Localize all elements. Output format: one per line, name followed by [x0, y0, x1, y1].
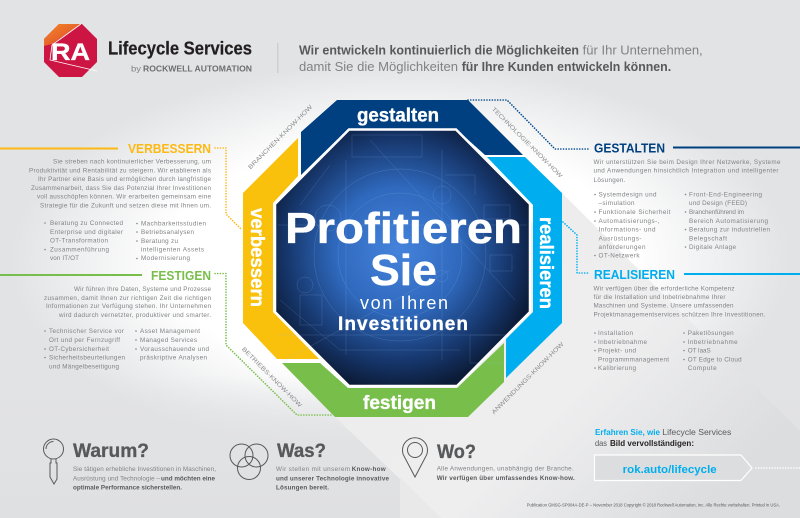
band: realisieren [487, 157, 562, 378]
panel: Festigen: OT-Cybersicherheit [49, 346, 109, 353]
panel: Verbessern: von IT/OT [50, 255, 79, 262]
panel: Festigen: Vorausschauende und [140, 346, 209, 353]
band: festigen [282, 343, 504, 417]
label: Anwendungs-Know-how: ANWENDUNGS-KNOW-HOW [491, 341, 566, 416]
panel: Verbessern: Beratung zu [141, 238, 178, 245]
label: Branchen-Know-how: BRANCHEN-KNOW-HOW [248, 104, 314, 171]
panel: Festigen: zusammen, damit Ihnen zur richtigen Zeit die richtigen [44, 295, 211, 302]
panel: Verbessern: Zusammenarbeit, dass Sie das Potenzial Ihrer Investitionen [31, 185, 211, 192]
panel: Wo: Wo? [437, 442, 476, 463]
logo: RA [51, 39, 90, 66]
panel: Gestalten: Bereich Automatisierung [689, 218, 768, 225]
panel: Was: Was? [277, 441, 326, 462]
panel: Realisieren: REALISIEREN [594, 267, 675, 282]
panel: Wo [402, 438, 575, 482]
panel: Wo: Wir verfügen über umfassendes Know-how. [437, 475, 575, 482]
panel: Was: Wir stellen mit unserem [276, 466, 350, 473]
band: realisieren: realisieren [535, 217, 556, 309]
dotted connector: festigen [215, 274, 333, 415]
panel: Gestalten: Ausrüstungs- [598, 236, 642, 242]
panel: Realisieren: Wir verfügen über die erforderliche Kompetenz [594, 286, 734, 292]
icon: overlapping circles [230, 444, 268, 480]
panel: Realisieren: Paketlösungen [688, 330, 734, 337]
logo [44, 24, 97, 77]
label: Technologie-Know-how: TECHNOLOGIE-KNOW-HOW [490, 107, 563, 180]
panel: Verbessern: Beratung zu Connected [50, 220, 123, 227]
band: verbessern: verbessern [246, 208, 267, 307]
panel: Warum: Sie tätigen erhebliche Investitionen in Maschinen, [73, 466, 216, 473]
panel: Gestalten: Branchenführend im [689, 209, 744, 216]
panel: Verbessern: Zusammenführung [50, 246, 109, 254]
button: rok.auto/lifecycle: rok.auto/lifecycle [623, 464, 717, 476]
panel: Warum: Ausrüstung und Technologie – [73, 476, 160, 482]
panel: Verbessern: Machbarkeitsstudien [141, 220, 206, 228]
panel: Warum: optimale Performance sicherstellen. [73, 484, 182, 492]
dotted connector: gestalten [468, 100, 588, 149]
panel: Verbessern: Strategie für die Zukunft und setzen diese mit Ihnen um. [40, 202, 211, 210]
panel: Festigen: präskriptive Analysen [140, 354, 207, 362]
panel: Verbessern: Ihr Partner eine Basis und ermöglichen durch langfristige [38, 176, 211, 183]
panel: Festigen: Ort und per Fernzugriff [49, 337, 120, 344]
panel: Verbessern: VERBESSERN [128, 141, 211, 156]
panel: Festigen: Asset Management [140, 328, 200, 335]
panel: Warum: Warum? [73, 441, 149, 462]
panel: Festigen: FESTIGEN [151, 268, 211, 283]
panel: Warum: und möchten eine [161, 476, 215, 482]
headline: Wir entwickeln kontinuierlich die Möglichkeiten [299, 44, 579, 58]
panel: Gestalten: und Anwendungen hinsichtlich Integration und intelligenter [594, 168, 778, 174]
panel: Realisieren: OT IaaS [688, 348, 711, 354]
panel: Verbessern: Modernisierung [141, 255, 190, 262]
callout: learn more: Lifecycle Services [662, 428, 731, 437]
octagon diagram [243, 100, 562, 417]
center headline [285, 204, 522, 335]
panel: Realisieren: Programmmanagement [598, 356, 669, 364]
band: gestalten [301, 100, 523, 175]
panel: Verbessern: Produktivität und Rentabilität zu steigern. Wir etablieren als [29, 168, 211, 174]
headline: damit Sie die Möglichkeiten [299, 60, 458, 74]
panel: Was [230, 441, 389, 492]
panel: Realisieren: Inbetriebnahme [688, 339, 738, 346]
callout: learn more [595, 428, 731, 448]
panel: Gestalten: Belegschaft [689, 236, 727, 242]
panel: Verbessern: Enterprise und digitaler [50, 229, 123, 236]
panel: Realisieren: Projekt- und [598, 348, 636, 354]
brand name: ROCKWELL AUTOMATION [143, 64, 252, 74]
panel: Realisieren: Projektmanagementservices schützen Ihre Investitionen. [594, 312, 766, 318]
panel: Gestalten: Wir unterstützen Sie beim Design Ihrer Netzwerke, Systeme [594, 159, 781, 166]
brand name [108, 38, 252, 74]
footer: publication note: Publication GMSG-SP004A-DE-P – November 2018 Copyright © 2018 Rockwell Automation, Inc. Alle Rechte vorbehalten. Printed in USA. [527, 502, 780, 508]
panel: Was: Lösungen bereit. [276, 484, 329, 492]
panel: Realisieren: Installation [598, 330, 633, 337]
panel: Realisieren: Inbetriebnahme [598, 339, 647, 346]
panel: Verbessern: Betriebsanalysen [141, 229, 194, 236]
icon: magnifier [44, 439, 64, 484]
panel: Gestalten: OT-Netzwerk [598, 252, 640, 260]
brand name: by [131, 64, 142, 74]
panel: Gestalten: und Design (FEED) [689, 200, 747, 207]
callout: learn more: Bild vervollständigen: [610, 439, 694, 448]
panel: Gestalten: GESTALTEN [594, 141, 665, 156]
panel: Festigen: Managed Services [140, 337, 197, 344]
panel: Festigen: Technischer Service vor [49, 328, 124, 335]
headline [299, 44, 703, 74]
panel: Festigen: Sicherheitsbeurteilungen [49, 354, 125, 362]
dotted connector: realisieren [563, 222, 588, 273]
panel: Was: und unserer Technologie innovative [276, 476, 389, 482]
center panel [275, 130, 530, 386]
panel: Festigen: Informationen zur Verfügung stehen. Ihr Unternehmen [46, 303, 211, 310]
panel: Gestalten: Front-End-Engineering [689, 192, 762, 198]
panel: Gestalten: Digitale Anlage [689, 244, 736, 251]
icon: map pin [402, 438, 428, 477]
panel: Festigen: wird dadurch vernetzter, produktiver und smarter. [58, 312, 211, 319]
band: verbessern [243, 138, 319, 359]
panel: Realisieren: Maschinen und Systeme. Unsere umfassenden [594, 302, 734, 310]
panel: Was: Know-how [352, 466, 386, 473]
label: Betriebs-Know-how: BETRIEBS-KNOW-HOW [240, 347, 303, 409]
center headline: Investitionen [338, 314, 468, 335]
panel: Verbessern: voll ausschöpfen können. Wir erarbeiten gemeinsam eine [37, 194, 211, 200]
callout: learn more: Erfahren Sie, wie [595, 428, 661, 437]
panel: Verbessern: Sie streben nach kontinuierlicher Verbesserung, um [53, 158, 211, 166]
panel: Wo: Alle Anwendungen, unabhängig der Branche. [437, 466, 574, 473]
panel: Gestalten: Funktionale Sicherheit [598, 209, 671, 216]
panel: Verbessern: OT-Transformation [50, 238, 108, 244]
center headline: Profitieren [285, 204, 522, 253]
headline: für Ihr Unternehmen, [583, 44, 703, 58]
button: rok.auto/lifecycle [594, 455, 752, 480]
panel: Realisieren: für die Installation und Inbetriebnahme Ihrer [594, 294, 726, 301]
callout: learn more: das [595, 439, 607, 448]
panel: Realisieren: Compute [688, 365, 717, 372]
panel: Festigen [0, 268, 211, 370]
dotted connector: verbessern [215, 148, 242, 230]
panel: Verbessern: intelligenten Assets [141, 246, 204, 254]
band: gestalten: gestalten [357, 106, 439, 127]
center headline: von Ihren [360, 293, 448, 313]
panel: Realisieren: OT Edge to Cloud [688, 356, 742, 364]
panel: Gestalten: Systemdesign und [598, 192, 657, 198]
panel: Verbessern [0, 141, 211, 262]
headline: für Ihre Kunden entwickeln können. [462, 60, 671, 74]
panel: Gestalten [594, 141, 800, 260]
panel: Gestalten: Informations- und [598, 226, 656, 234]
panel: Realisieren [594, 267, 800, 372]
center headline: Sie [370, 246, 437, 295]
brand name: Lifecycle Services [108, 38, 252, 58]
panel: Gestalten: Automatisierungs-, [598, 218, 660, 225]
panel: Festigen: und Mängelbeseitigung [49, 364, 119, 370]
band: festigen: festigen [363, 393, 436, 414]
panel: Gestalten: anforderungen [598, 244, 646, 251]
panel: Warum [44, 439, 216, 492]
panel: Gestalten: Lösungen. [594, 177, 626, 184]
panel: Festigen: Wir führen Ihre Daten, Systeme und Prozesse [74, 286, 211, 293]
panel: Realisieren: Kalibrierung [598, 365, 636, 372]
panel: Gestalten: –simulation [598, 200, 635, 207]
panel: Gestalten: Beratung zur industriellen [689, 226, 770, 234]
